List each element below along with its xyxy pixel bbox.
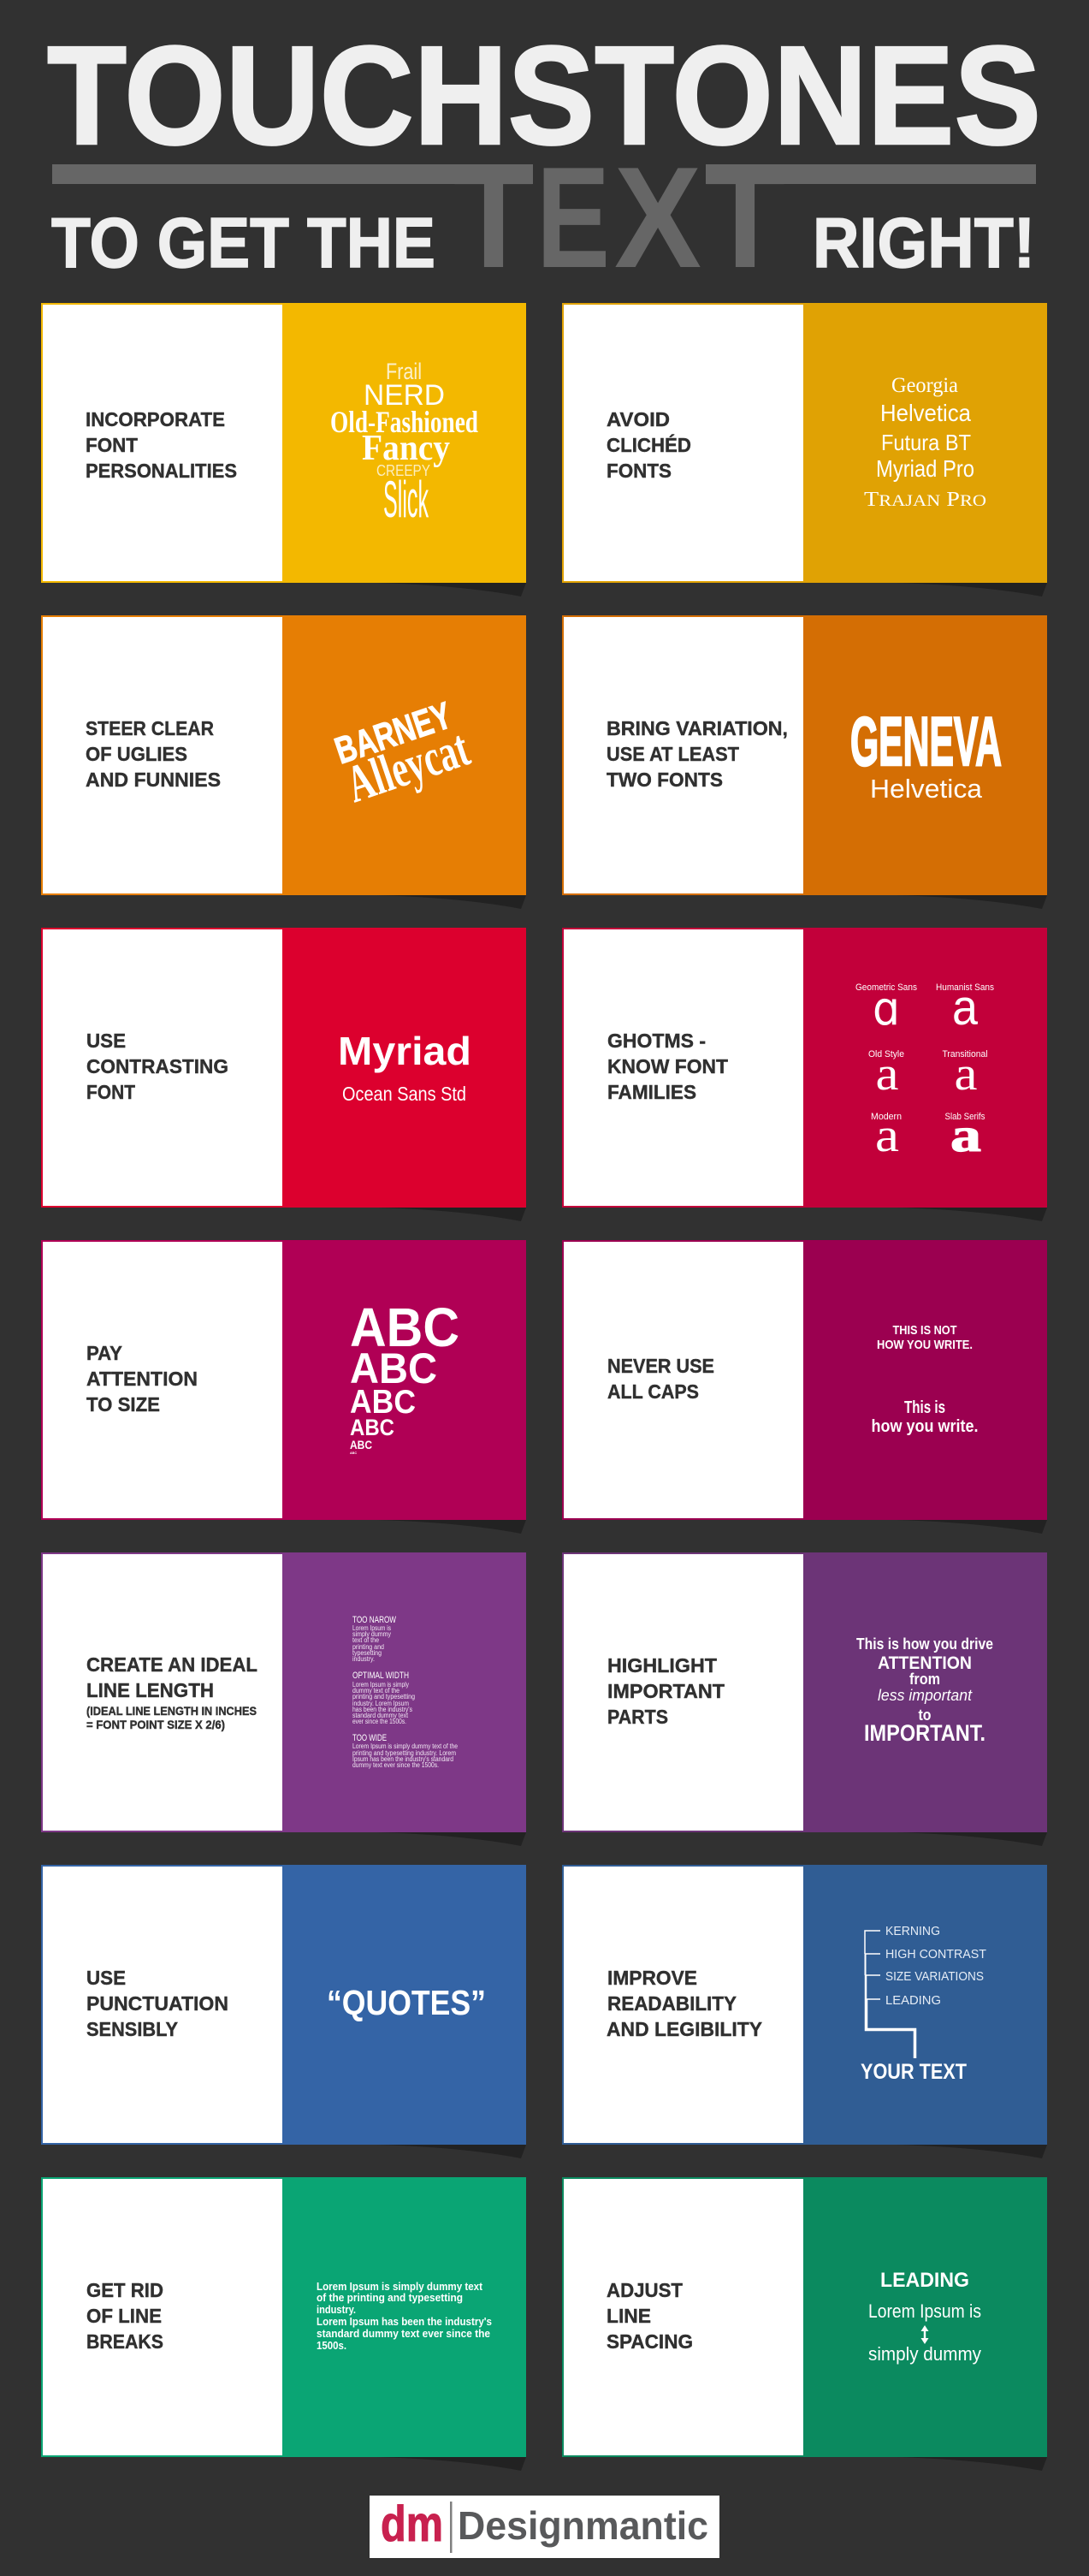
font samples: Futura BT xyxy=(881,430,971,455)
panel: highlight important parts xyxy=(562,1552,1047,1846)
leading example xyxy=(868,2269,981,2365)
label: GHOTMS - xyxy=(607,1030,706,1052)
sample: optimal width: dummy text of the xyxy=(352,1687,399,1695)
paragraph example: of the printing and typesetting xyxy=(317,2291,463,2304)
size samples: ABC xyxy=(350,1438,372,1451)
label: AND LEGIBILITY xyxy=(607,2018,762,2040)
label: INCORPORATE xyxy=(86,408,225,430)
label: FAMILIES xyxy=(607,1081,696,1103)
label: IMPORTANT xyxy=(607,1680,725,1702)
subheading: TO GET THE: TO GET THE xyxy=(51,203,435,282)
sample: optimal width xyxy=(352,1671,415,1725)
label: FONT xyxy=(86,434,138,456)
panel: pay attention to size xyxy=(41,1240,526,1534)
sample: too wide: printing and typesetting industry. Lorem xyxy=(352,1749,456,1757)
label: AND FUNNIES xyxy=(86,769,221,791)
sample: too wide: Lorem Ipsum is simply dummy text of the xyxy=(352,1742,458,1750)
logo: Designmantic: Designmantic xyxy=(458,2503,708,2548)
font family grid: a xyxy=(955,1048,978,1101)
font samples xyxy=(330,359,478,528)
font family grid: Geometric Sans xyxy=(855,982,917,993)
leading example: simply dummy xyxy=(868,2343,981,2365)
sample: optimal width: has been the industry's xyxy=(352,1706,412,1713)
sample: optimal width: OPTIMAL WIDTH xyxy=(352,1671,409,1681)
label: FONTS xyxy=(607,460,672,482)
panel: GHOTMS know font families xyxy=(562,928,1047,1221)
panel: avoid cliched fonts xyxy=(562,303,1047,597)
tree diagram: HIGH CONTRAST xyxy=(885,1947,986,1962)
font samples: Fancy xyxy=(362,429,450,468)
sample: optimal width: ever since the 1500s. xyxy=(352,1718,406,1725)
panel: use contrasting font xyxy=(41,928,526,1221)
label: OF LINE xyxy=(86,2305,162,2327)
sample: optimal width: standard dummy text xyxy=(352,1712,409,1719)
label: LINE LENGTH xyxy=(86,1679,214,1701)
font sample: Myriad: Myriad xyxy=(338,1029,471,1073)
panel: adjust line spacing xyxy=(562,2177,1047,2471)
formula note: (IDEAL LINE LENGTH IN INCHES xyxy=(86,1704,257,1718)
tree diagram: LEADING xyxy=(885,1993,941,2008)
sample: too narrow: printing and xyxy=(352,1643,384,1651)
tree diagram: SIZE VARIATIONS xyxy=(885,1969,984,1984)
quotes example: “QUOTES” xyxy=(327,1983,486,2022)
font sample: Ocean Sans Std: Ocean Sans Std xyxy=(342,1083,466,1105)
sample: too narrow: Lorem Ipsum is xyxy=(352,1624,391,1632)
label: PUNCTUATION xyxy=(86,1992,228,2015)
emphasis example: from xyxy=(909,1671,940,1688)
font family grid: ɑ xyxy=(873,982,900,1036)
panel: create an ideal line length xyxy=(41,1552,526,1846)
emphasis example: less important xyxy=(878,1687,973,1704)
sample: too wide: dummy text ever since the 1500s. xyxy=(352,1761,439,1769)
sample: too narrow: simply dummy xyxy=(352,1630,391,1638)
label: PARTS xyxy=(607,1706,668,1728)
font family grid: a xyxy=(876,1048,899,1101)
label: SENSIBLY xyxy=(86,2018,178,2040)
emphasis example: ATTENTION xyxy=(878,1653,972,1673)
font samples: Georgia xyxy=(891,374,958,397)
sample: too narrow: TOO NAROW xyxy=(352,1615,396,1625)
font samples: NERD xyxy=(364,379,445,412)
font samples xyxy=(864,374,986,511)
oversized word: TEXT with extended bars: T xyxy=(705,137,785,298)
tree diagram: KERNING xyxy=(885,1924,940,1938)
label: USE xyxy=(86,1967,126,1989)
label: PAY xyxy=(86,1342,122,1364)
tree diagram: YOUR TEXT xyxy=(861,2060,967,2084)
font family grid: Humanist Sans xyxy=(936,982,994,993)
size samples: ABC xyxy=(350,1297,459,1358)
sample: too narrow xyxy=(352,1615,396,1663)
label: GET RID xyxy=(86,2279,163,2301)
sample: optimal width: industry. Lorem Ipsum xyxy=(352,1700,409,1707)
paragraph example: Lorem Ipsum has been the industry's xyxy=(317,2315,492,2328)
font samples: Old-Fashioned xyxy=(330,405,478,439)
sample: too narrow: industry. xyxy=(352,1655,375,1663)
font family grid: a xyxy=(950,1109,981,1162)
panel: bring variation xyxy=(562,615,1047,909)
paragraph example: 1500s. xyxy=(317,2339,346,2352)
paragraph example: standard dummy text ever since the xyxy=(317,2327,490,2340)
font family grid: Old Style xyxy=(868,1049,904,1059)
label: OF UGLIES xyxy=(86,743,187,765)
size samples: ABC xyxy=(350,1415,394,1440)
leading example: Lorem Ipsum is xyxy=(868,2300,981,2322)
label: ADJUST xyxy=(607,2279,683,2301)
label: KNOW FONT xyxy=(607,1055,728,1077)
label: BREAKS xyxy=(86,2330,163,2353)
subheading: RIGHT!: RIGHT! xyxy=(813,203,1035,282)
size samples xyxy=(350,1297,459,1455)
label: USE AT LEAST xyxy=(607,743,739,765)
emphasis example: This is how you drive xyxy=(856,1635,993,1653)
font samples: Alleycat: Alleycat xyxy=(340,719,476,814)
formula note: = FONT POINT SIZE X 2/6) xyxy=(86,1718,225,1731)
paragraph example: Lorem Ipsum is simply dummy text xyxy=(317,2280,483,2293)
label: CLICHÉD xyxy=(607,433,691,456)
panel: get rid of line breaks xyxy=(41,2177,526,2471)
sample: optimal width: printing and typesetting xyxy=(352,1693,415,1701)
panel: improve readability and legibility xyxy=(562,1865,1047,2158)
emphasis example: IMPORTANT. xyxy=(864,1720,985,1746)
paragraph example: industry. xyxy=(317,2303,356,2316)
sentence case example xyxy=(871,1398,979,1436)
caps example xyxy=(877,1323,973,1352)
font samples: Helvetica xyxy=(880,400,971,426)
label: ALL CAPS xyxy=(607,1380,699,1403)
label: PERSONALITIES xyxy=(86,460,237,482)
label: BRING VARIATION, xyxy=(607,717,788,739)
sample: too wide: Ipsum has been the industry's standard xyxy=(352,1755,453,1763)
label: FONT xyxy=(86,1081,135,1103)
sample: too wide xyxy=(352,1733,458,1769)
label: LINE xyxy=(607,2305,651,2327)
sentence case example: how you write. xyxy=(871,1417,979,1436)
label: CREATE AN IDEAL xyxy=(86,1653,257,1676)
font family grid: Slab Serifs xyxy=(944,1112,985,1122)
font samples: TRAJAN PRO xyxy=(864,489,986,511)
oversized word: TEXT with extended bars: X xyxy=(614,137,701,298)
label: TWO FONTS xyxy=(607,769,723,791)
oversized word: TEXT with extended bars: E xyxy=(536,137,610,298)
font family grid: Modern xyxy=(871,1112,902,1122)
label: AVOID xyxy=(607,408,670,430)
oversized word: TEXT with extended bars xyxy=(52,137,1036,298)
logo: Designmantic: dm xyxy=(381,2496,443,2552)
heading: TOUCHSTONES: TOUCHSTONES xyxy=(47,17,1041,174)
label: READABILITY xyxy=(607,1992,737,2015)
panel: never use all caps xyxy=(562,1240,1047,1534)
caps example: THIS IS NOT xyxy=(893,1323,956,1338)
font sample: Helvetica: Helvetica xyxy=(870,774,983,804)
caps example: HOW YOU WRITE. xyxy=(877,1338,973,1352)
logo: Designmantic xyxy=(370,2496,719,2558)
font samples: CREEPY xyxy=(376,462,430,479)
panel: use punctuation sensibly xyxy=(41,1865,526,2158)
oversized word: TEXT with extended bars: T xyxy=(453,137,534,298)
font samples: Barney: BARNEY xyxy=(330,694,457,772)
font samples: Slick xyxy=(383,471,429,528)
label: TO SIZE xyxy=(86,1393,160,1416)
sample: too wide: TOO WIDE xyxy=(352,1733,387,1743)
label: ATTENTION xyxy=(86,1368,198,1390)
panel: incorporate font personalities xyxy=(41,303,526,597)
leading example: LEADING xyxy=(880,2269,969,2292)
size samples: ABC xyxy=(350,1344,437,1392)
label: STEER CLEAR xyxy=(86,717,214,739)
sample: too narrow: text of the xyxy=(352,1636,379,1644)
emphasis example: to xyxy=(919,1706,931,1724)
size samples: ABC xyxy=(350,1384,416,1421)
sample: too narrow: typesetting xyxy=(352,1649,382,1657)
panel: steer clear of uglies and funnies xyxy=(41,615,526,909)
font family grid xyxy=(855,980,994,1162)
label: CONTRASTING xyxy=(86,1055,228,1077)
font family grid: Transitional xyxy=(943,1049,987,1059)
label: NEVER USE xyxy=(607,1355,714,1377)
label: USE xyxy=(86,1030,126,1052)
tree diagram xyxy=(861,1924,986,2084)
label: IMPROVE xyxy=(607,1967,697,1989)
label: HIGHLIGHT xyxy=(607,1654,717,1677)
font family grid: a xyxy=(952,980,979,1036)
sample: optimal width: Lorem Ipsum is simply xyxy=(352,1681,409,1689)
title: Touchstones to get the text right xyxy=(47,17,1041,298)
sentence case example: This is xyxy=(904,1398,945,1417)
font samples: Myriad Pro xyxy=(876,455,974,482)
font samples: Frail xyxy=(386,359,422,384)
font family grid: a xyxy=(875,1109,899,1162)
label: SPACING xyxy=(607,2330,693,2353)
size samples: ABC xyxy=(350,1451,357,1455)
emphasis example xyxy=(856,1635,993,1746)
